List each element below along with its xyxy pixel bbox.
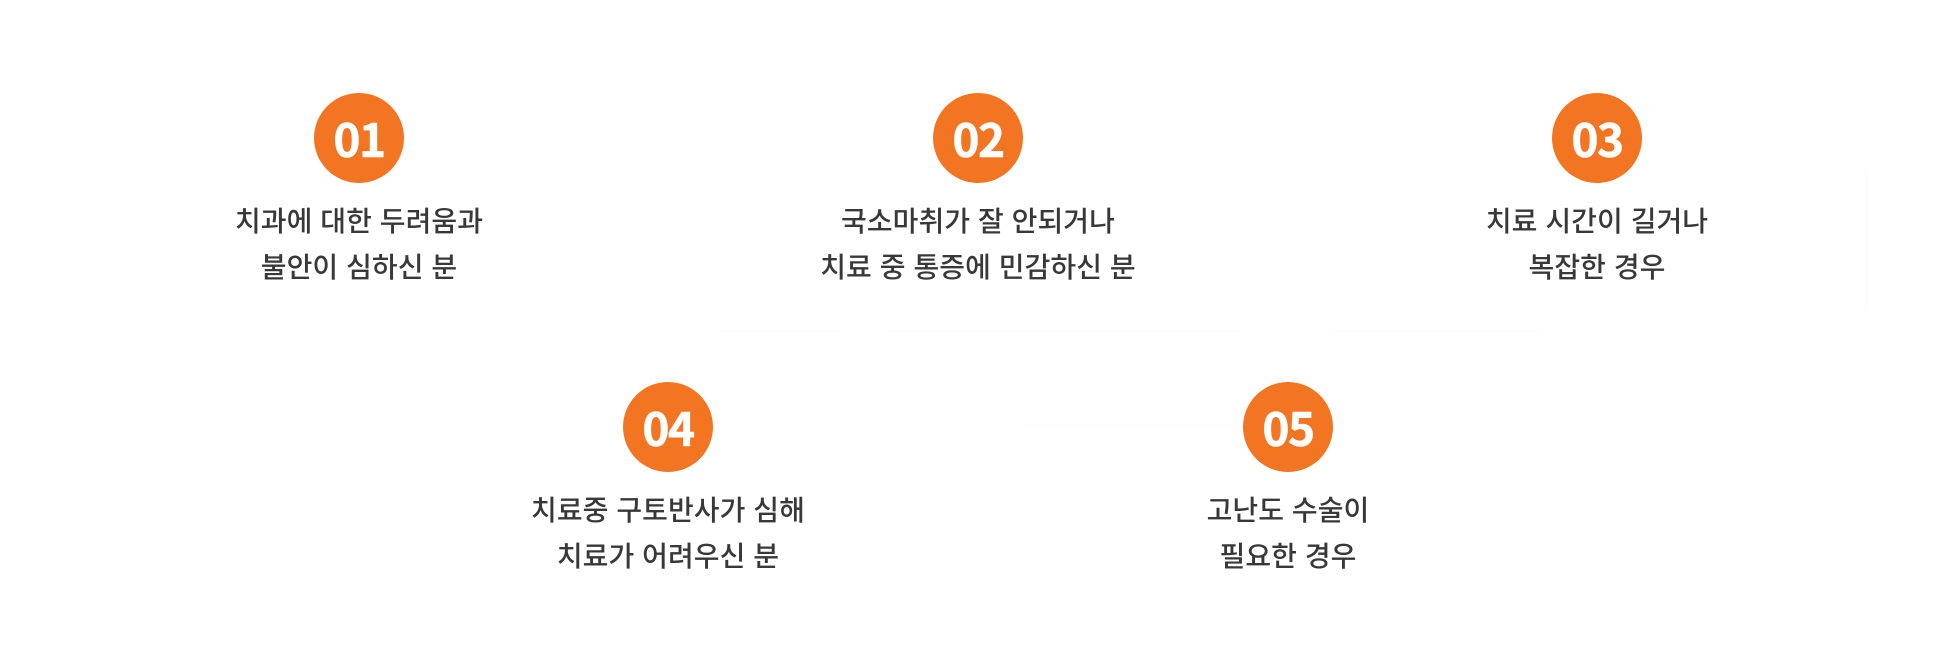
item 03 xyxy=(1486,93,1708,286)
text 02 xyxy=(820,200,1136,286)
badge 01: 01 xyxy=(333,105,385,171)
text 05: 필요한 경우 xyxy=(1220,535,1356,575)
item 04 xyxy=(531,382,805,575)
badge 04 xyxy=(623,382,713,472)
text 04 xyxy=(531,489,805,575)
text 03: 복잡한 경우 xyxy=(1529,246,1665,286)
badge 05: 05 xyxy=(1262,394,1314,460)
badge 01 xyxy=(314,93,404,183)
item 02 xyxy=(820,93,1136,286)
text 02: 치료 중 통증에 민감하신 분 xyxy=(820,246,1136,286)
text 01: 불안이 심하신 분 xyxy=(261,246,457,286)
item 01 xyxy=(235,93,483,286)
badge 03 xyxy=(1552,93,1642,183)
text 04: 치료가 어려우신 분 xyxy=(557,535,779,575)
text 05: 고난도 수술이 xyxy=(1207,489,1369,529)
badge 02 xyxy=(933,93,1023,183)
text 01: 치과에 대한 두려움과 xyxy=(235,200,483,240)
badge 04: 04 xyxy=(642,394,694,460)
text 04: 치료중 구토반사가 심해 xyxy=(531,489,805,529)
text 03 xyxy=(1486,200,1708,286)
badge 03: 03 xyxy=(1571,105,1623,171)
item 05 xyxy=(1207,382,1369,575)
badge 02: 02 xyxy=(952,105,1004,171)
badge 05 xyxy=(1243,382,1333,472)
text 01 xyxy=(235,200,483,286)
text 02: 국소마취가 잘 안되거나 xyxy=(841,200,1115,240)
text 03: 치료 시간이 길거나 xyxy=(1486,200,1708,240)
text 05 xyxy=(1207,489,1369,575)
